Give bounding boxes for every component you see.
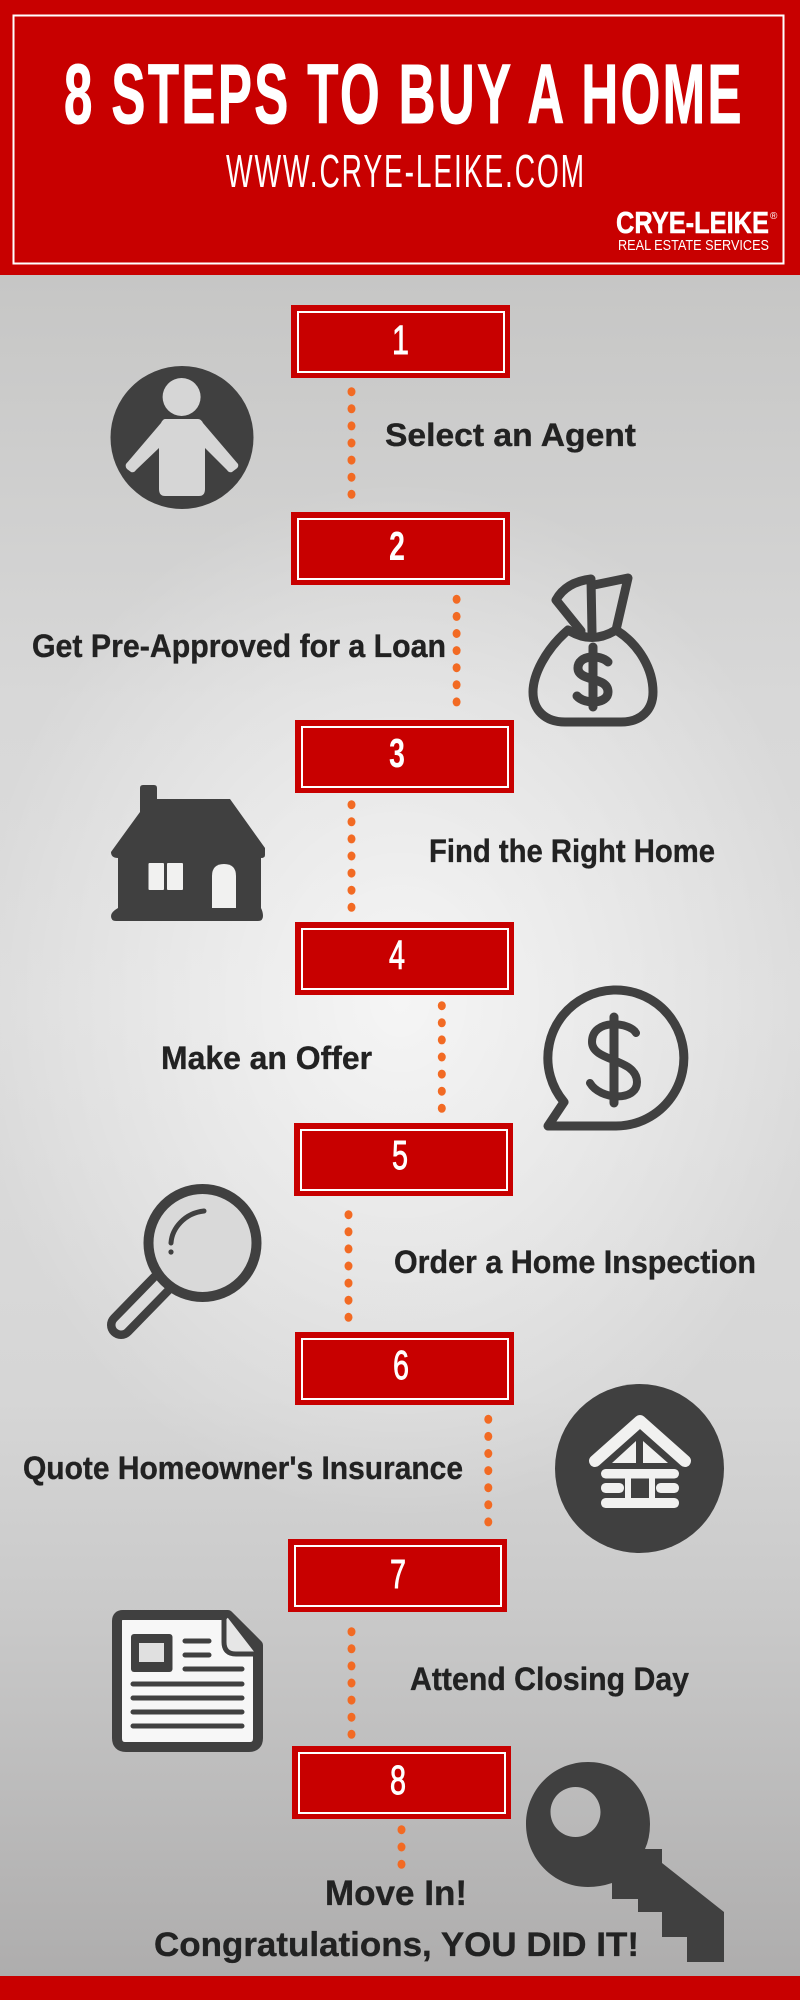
step 4 box bbox=[295, 922, 514, 995]
dotted connector 8 bbox=[398, 1825, 406, 1869]
step 3 box bbox=[295, 720, 514, 793]
panel: header banner bbox=[0, 0, 800, 275]
step 7 box bbox=[288, 1539, 507, 1612]
icon: document bbox=[117, 1614, 259, 1747]
dotted connector 2 bbox=[453, 595, 461, 706]
step 3 label: Find the Right Home bbox=[429, 833, 715, 869]
step 8 box: 8 bbox=[390, 1757, 406, 1803]
dotted connector 6 bbox=[484, 1415, 492, 1526]
closing message: Move In! bbox=[325, 1874, 467, 1913]
logo: Crye-Leike: CRYE-LEIKE bbox=[616, 205, 769, 240]
step 2 box bbox=[291, 512, 510, 585]
logo: Crye-Leike bbox=[616, 205, 778, 254]
step 2 label: Get Pre-Approved for a Loan bbox=[32, 628, 446, 664]
logo: Crye-Leike: ® bbox=[770, 211, 778, 222]
step 1 label: Select an Agent bbox=[385, 417, 636, 453]
dotted connector 1 bbox=[348, 387, 356, 499]
step 2 box: 2 bbox=[389, 523, 405, 569]
step 5 box bbox=[294, 1123, 513, 1196]
website url: WWW.CRYE-LEIKE.COM bbox=[226, 145, 586, 197]
closing message: Congratulations, YOU DID IT! bbox=[154, 1926, 639, 1964]
icon: money bag bbox=[533, 578, 653, 722]
step 8 box bbox=[292, 1746, 511, 1819]
step 7 box: 7 bbox=[390, 1551, 406, 1597]
icon: cabin in circle bbox=[555, 1384, 724, 1553]
icon: magnifying glass bbox=[121, 1189, 256, 1325]
dotted connector 7 bbox=[348, 1627, 356, 1739]
step 4 label: Make an Offer bbox=[161, 1040, 372, 1076]
dotted connector 4 bbox=[438, 1001, 446, 1113]
dotted connector 5 bbox=[344, 1210, 352, 1322]
step 3 box: 3 bbox=[389, 730, 405, 776]
icon: house bbox=[111, 785, 265, 921]
step 5 label: Order a Home Inspection bbox=[394, 1244, 756, 1280]
closing message bbox=[154, 1874, 639, 1964]
icon: key bbox=[526, 1762, 724, 1962]
icon: person in circle bbox=[110, 366, 254, 509]
step 1 box bbox=[291, 305, 510, 378]
step 7 label: Attend Closing Day bbox=[410, 1661, 689, 1697]
dotted connector 3 bbox=[348, 800, 356, 912]
step 6 label: Quote Homeowner's Insurance bbox=[23, 1450, 463, 1486]
step 1 box: 1 bbox=[392, 317, 409, 363]
footer bar bbox=[0, 1976, 800, 2000]
step 6 box bbox=[295, 1332, 514, 1405]
step 5 box: 5 bbox=[392, 1132, 408, 1178]
logo: Crye-Leike: REAL ESTATE SERVICES bbox=[618, 237, 769, 254]
step 4 box: 4 bbox=[389, 932, 405, 978]
icon: dollar speech bubble bbox=[548, 990, 684, 1126]
step 6 box: 6 bbox=[393, 1342, 409, 1388]
